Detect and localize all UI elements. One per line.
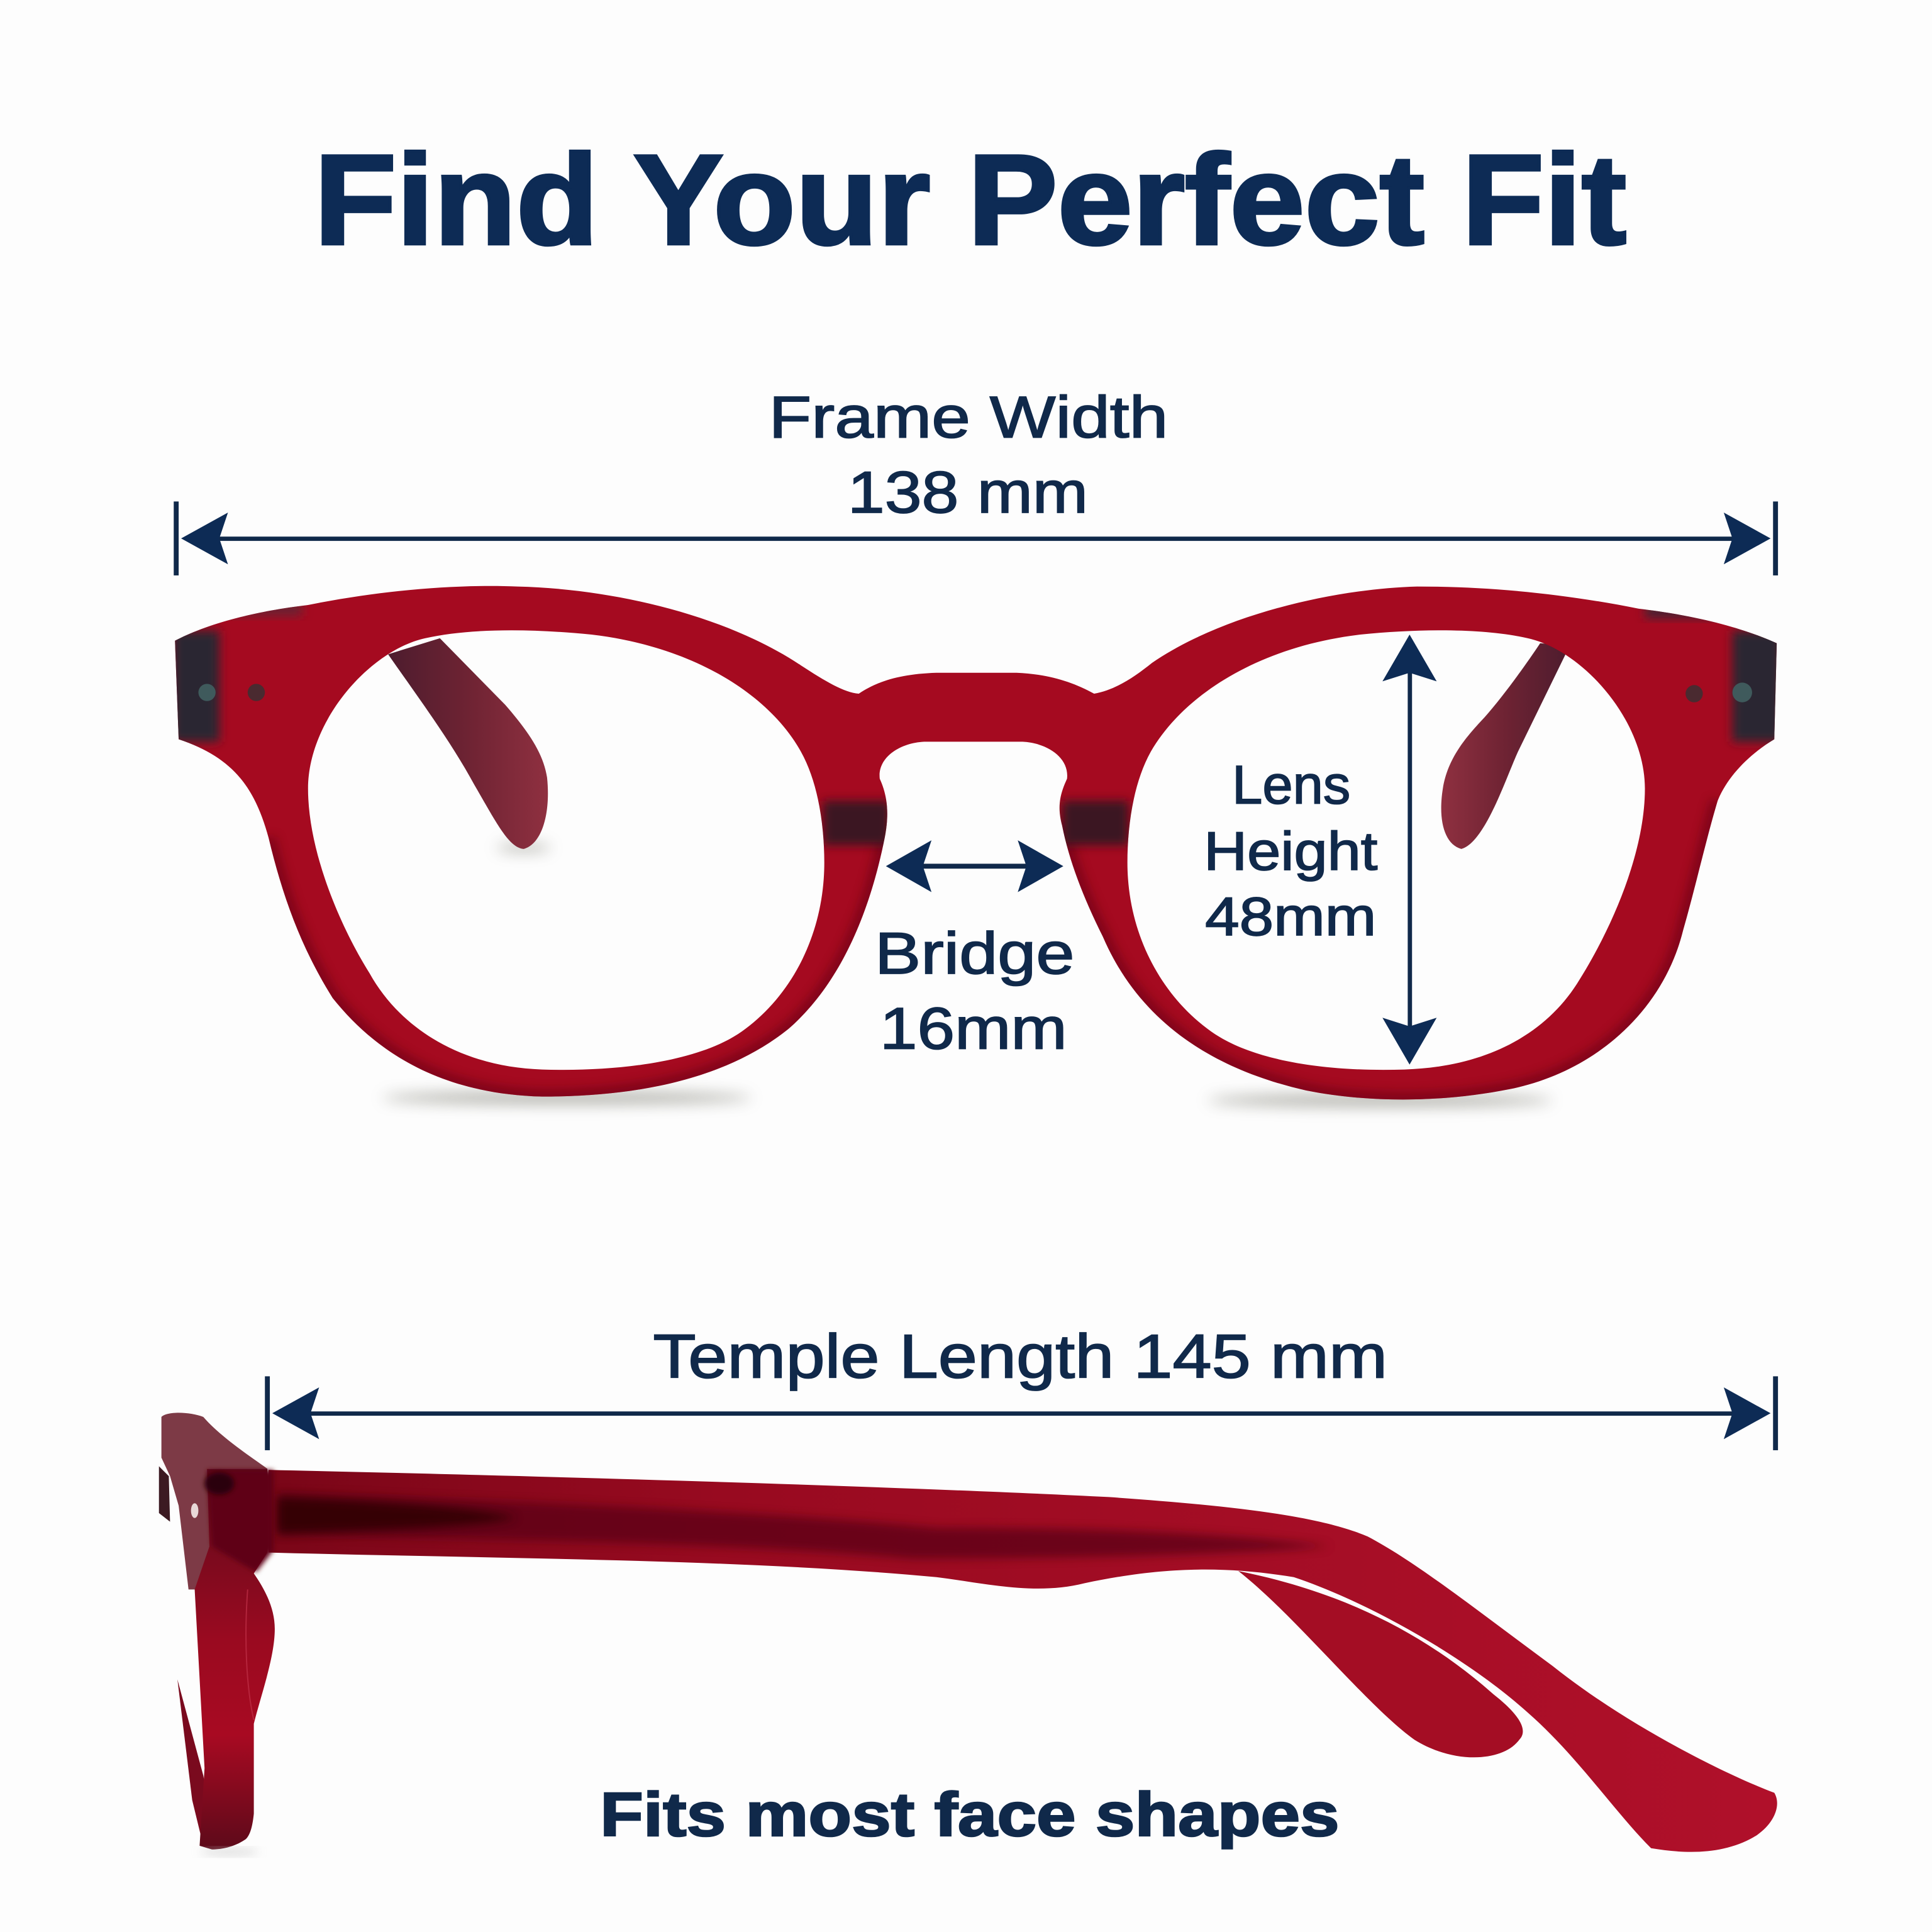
rim inner highlight line [246, 1589, 254, 1720]
near temple arm [269, 1470, 1777, 1852]
top corner facets [216, 601, 302, 616]
glasses front view [172, 586, 1782, 1099]
bridge label: Bridge [875, 920, 1074, 986]
bridge arrow [886, 840, 1063, 892]
frame shading [172, 601, 1782, 1099]
glasses side view [159, 1413, 1777, 1856]
bridge label [875, 920, 1074, 1061]
frame [175, 586, 1777, 1099]
lens height arrow [1382, 635, 1436, 1065]
title: Find Your Perfect Fit [314, 129, 1626, 272]
temple stub: left [388, 638, 548, 849]
lens height label [1204, 755, 1377, 947]
rivet [191, 1503, 198, 1518]
lens height label: 48mm [1205, 887, 1376, 947]
lens height label: Height [1204, 821, 1377, 882]
temple hinge ends [172, 631, 219, 741]
hinge corner dark [204, 1472, 234, 1494]
lens height label: Lens [1232, 755, 1350, 815]
inner dark rim [177, 1679, 216, 1846]
bridge label: 16mm [880, 995, 1067, 1061]
rivets [198, 682, 1752, 702]
temple length arrow [265, 1376, 1778, 1450]
temple stub: right [1441, 643, 1570, 849]
frame width label: 138 mm [848, 459, 1088, 525]
front rim [189, 1468, 275, 1850]
outer edge darkening [269, 801, 1718, 1099]
far temple arm [1238, 1571, 1523, 1757]
frame width label: Frame Width [769, 384, 1168, 450]
top rim facet [162, 1413, 267, 1589]
nose pad bands [823, 801, 890, 845]
hinge block [207, 1470, 274, 1572]
side shadow [199, 1848, 258, 1856]
frame width label [769, 384, 1168, 525]
temple dark streak [277, 1494, 1331, 1558]
frame width arrow [174, 501, 1778, 575]
temple length label: Temple Length 145 mm [653, 1321, 1387, 1391]
footer caption: Fits most face shapes [600, 1780, 1340, 1849]
temple side dark piece [159, 1466, 170, 1522]
front view shadows [382, 844, 1553, 1106]
